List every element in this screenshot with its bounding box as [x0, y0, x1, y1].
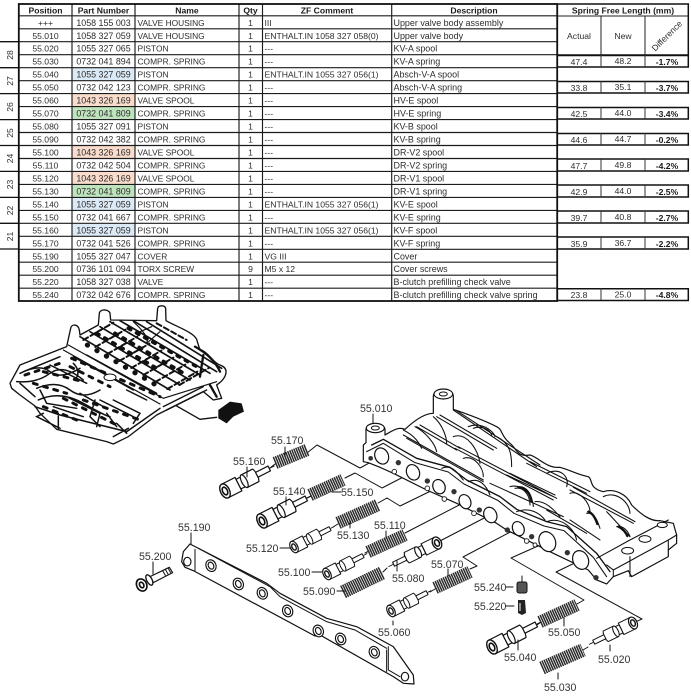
description column: KV-A spool	[394, 44, 437, 54]
spring free length values: -0.2%	[656, 135, 679, 145]
position column: 55.080	[32, 122, 59, 132]
position column: 55.090	[32, 134, 59, 144]
part number column: 0732 041 526	[76, 238, 131, 248]
part number column: 1058 327 059	[76, 31, 131, 41]
part number callouts: 55.140	[273, 486, 306, 498]
quantity column: 1	[248, 199, 253, 209]
callout tick marks	[153, 414, 610, 679]
description column: KV-F spool	[394, 225, 437, 235]
position column	[32, 18, 59, 300]
spring free length values: -4.8%	[656, 290, 679, 300]
quantity column: 1	[248, 57, 253, 67]
part number column: 1055 327 059	[76, 70, 131, 80]
position column: 55.020	[32, 44, 59, 54]
side group numbers: 25	[5, 128, 15, 138]
description column: Absch-V-A spring	[394, 83, 462, 93]
screw 55.200	[134, 567, 173, 593]
part number callouts: 55.150	[341, 487, 374, 499]
spring free length values: 23.8	[571, 290, 588, 300]
lower plate channels	[17, 355, 160, 437]
table header: ZF Comment	[301, 5, 353, 15]
table header: Position	[29, 5, 62, 15]
name column: VALVE HOUSING	[138, 31, 205, 41]
part number callouts: 55.010	[360, 403, 393, 415]
ZF comment column: ---	[264, 83, 273, 93]
spring length column headers: Difference	[650, 18, 684, 53]
coloured part number cells	[72, 68, 135, 236]
name column: COMPR. SPRING	[138, 83, 205, 93]
spring free length values: 47.4	[571, 57, 588, 67]
valve housing 55.010	[363, 389, 677, 584]
spools	[218, 459, 639, 656]
spring free length values: 35.9	[571, 239, 588, 249]
spring free length values: 25.0	[615, 289, 632, 299]
description column: DR-V2 spool	[394, 148, 444, 158]
description column: DR-V1 spool	[394, 173, 444, 183]
spring free length values: 40.8	[615, 212, 632, 222]
position column: 55.070	[32, 109, 59, 119]
description column: Cover screws	[394, 264, 448, 274]
part number callouts: 55.110	[374, 520, 406, 532]
quantity column: 1	[248, 44, 253, 54]
spring free length values: 39.7	[571, 213, 588, 223]
description column: Cover	[394, 251, 417, 261]
quantity column	[248, 18, 253, 300]
part number column: 0732 042 382	[76, 134, 131, 144]
spring free length values: -4.2%	[656, 161, 679, 171]
part number column: 1055 327 059	[76, 199, 131, 209]
side group numbers: 24	[5, 154, 15, 163]
spring free length values: 42.5	[571, 109, 588, 119]
ZF comment column: ---	[264, 212, 273, 222]
quantity column: 1	[248, 83, 253, 93]
description column: HV-E spring	[394, 109, 441, 119]
quantity column: 1	[248, 186, 253, 196]
part number callouts: 55.080	[392, 573, 425, 585]
quantity column: 1	[248, 160, 253, 170]
part number column: 1055 327 091	[76, 122, 131, 132]
spring length column headers: Actual	[567, 31, 591, 41]
part number callouts: 55.120	[246, 543, 279, 555]
spring free length values: -3.7%	[656, 83, 679, 93]
quantity column: 1	[248, 225, 253, 235]
position column: 55.060	[32, 96, 59, 106]
front holes	[87, 345, 160, 387]
spring free length values: 36.7	[615, 238, 632, 248]
spring free length values: 44.6	[571, 135, 588, 145]
cover 55.190	[182, 544, 414, 684]
description column: DR-V1 spring	[394, 186, 447, 196]
part number column: 1055 327 047	[76, 251, 131, 261]
part number callouts: 55.170	[271, 435, 304, 447]
name column: COMPR. SPRING	[138, 160, 205, 170]
part number column: 0732 041 809	[76, 109, 131, 119]
name column: PISTON	[138, 44, 169, 54]
quantity column: 1	[248, 134, 253, 144]
ZF comment column: ---	[264, 122, 273, 132]
ZF comment column: ---	[264, 96, 273, 106]
ZF comment column: ---	[264, 277, 273, 287]
position column: 55.110	[33, 160, 59, 170]
quantity column: 1	[248, 122, 253, 132]
ZF comment column: ENTHALT.IN 1055 327 056(1)	[264, 225, 379, 235]
quantity column: 1	[248, 109, 253, 119]
name column: COMPR. SPRING	[138, 212, 205, 222]
name column: PISTON	[138, 70, 169, 80]
name column: COMPR. SPRING	[138, 109, 205, 119]
part number column: 0732 041 667	[76, 212, 131, 222]
spring free length values: -3.4%	[656, 109, 679, 119]
quantity column: 1	[248, 277, 253, 287]
part number callouts: 55.030	[544, 682, 577, 694]
name column: VALVE HOUSING	[138, 18, 205, 28]
ZF comment column: ---	[264, 238, 273, 248]
spring free length values	[557, 55, 688, 300]
position column: 55.010	[32, 31, 59, 41]
quantity column: 1	[248, 290, 253, 300]
part number column: 0732 042 504	[76, 160, 131, 170]
side group numbers	[0, 42, 18, 249]
description column: B-clutch prefilling check valve spring	[394, 290, 538, 300]
position column: 55.130	[32, 186, 59, 196]
spring free length values: 48.2	[615, 56, 632, 66]
description column: KV-B spring	[394, 134, 441, 144]
spring free length values: -2.7%	[656, 213, 679, 223]
part number column: 1043 326 169	[76, 96, 131, 106]
ZF comment column: ENTHALT.IN 1055 327 056(1)	[264, 70, 379, 80]
quantity column: 1	[248, 148, 253, 158]
table header: Name	[175, 5, 199, 15]
description column: KV-A spring	[394, 57, 440, 67]
part number column: 0732 042 123	[76, 83, 131, 93]
part number column: 1043 326 169	[76, 173, 131, 183]
spring free length values: -2.2%	[656, 239, 679, 249]
part number column: 0732 042 676	[76, 290, 131, 300]
ZF comment column: VG III	[264, 251, 286, 261]
spring free length values: -2.5%	[656, 187, 679, 197]
assembled valve body illustration	[10, 306, 244, 444]
side group numbers: 21	[5, 232, 15, 241]
name column: COMPR. SPRING	[138, 186, 205, 196]
quantity column: 1	[248, 96, 253, 106]
description column: HV-E spool	[394, 96, 438, 106]
part number column: 0732 041 809	[76, 186, 131, 196]
description column: B-clutch prefilling check valve	[394, 277, 511, 287]
name column: COMPR. SPRING	[138, 238, 205, 248]
description column: Upper valve body	[394, 31, 464, 41]
ZF comment column: ---	[264, 160, 273, 170]
part number callouts: 55.050	[548, 627, 581, 639]
ZF comment column: ---	[264, 109, 273, 119]
part number column: 0732 041 894	[76, 57, 131, 67]
ZF comment column: ENTHALT.IN 1058 327 058(0)	[264, 31, 379, 41]
name column: PISTON	[138, 225, 169, 235]
description column: Absch-V-A spool	[394, 70, 459, 80]
position column: 55.170	[32, 238, 59, 248]
quantity column: 1	[248, 238, 253, 248]
table grid	[18, 4, 688, 301]
name column: VALVE SPOOL	[138, 148, 195, 158]
position column: 55.040	[32, 70, 59, 80]
ZF comment column	[264, 18, 379, 300]
table header: Spring Free Length (mm)	[572, 5, 674, 15]
name column: COMPR. SPRING	[138, 290, 205, 300]
description column: Upper valve body assembly	[394, 18, 504, 28]
name column: COMPR. SPRING	[138, 57, 205, 67]
part number column: 1058 327 038	[76, 277, 131, 287]
side group numbers: 28	[5, 50, 15, 60]
part number column	[76, 18, 131, 300]
name column: VALVE SPOOL	[138, 173, 195, 183]
exploded view leader lines	[183, 445, 642, 650]
table header: Qty	[243, 5, 258, 15]
spring free length values: 33.8	[571, 83, 588, 93]
side group numbers: 23	[5, 180, 15, 189]
ZF comment column: ---	[264, 148, 273, 158]
spring free length values: 44.0	[615, 108, 632, 118]
part number callouts: 55.220	[474, 601, 507, 613]
description column: DR-V2 spring	[394, 160, 447, 170]
ZF comment column: M5 x 12	[264, 264, 295, 274]
part number callouts: 55.040	[504, 652, 537, 664]
spring free length values: 42.9	[571, 187, 588, 197]
parts table	[0, 4, 688, 301]
ZF comment column: ---	[264, 134, 273, 144]
part number column: 1058 155 003	[76, 18, 131, 28]
side group numbers: 22	[5, 206, 15, 215]
description column: KV-E spool	[394, 199, 438, 209]
spring free length values: -1.7%	[656, 57, 679, 67]
position column: 55.030	[32, 57, 59, 67]
spring free length values: 47.7	[571, 161, 588, 171]
name column: PISTON	[138, 199, 169, 209]
position column: 55.100	[32, 148, 59, 158]
part number callouts: 55.100	[278, 567, 311, 579]
quantity column: 1	[248, 212, 253, 222]
quantity column: 1	[248, 18, 253, 28]
wiring connector	[177, 402, 244, 423]
name column: PISTON	[138, 122, 169, 132]
position column: +++	[38, 18, 53, 28]
check valve parts	[517, 582, 527, 615]
spring length column headers: New	[614, 31, 632, 41]
part number callouts: 55.060	[378, 627, 411, 639]
quantity column: 1	[248, 70, 253, 80]
name column: VALVE	[138, 277, 164, 287]
position column: 55.140	[32, 199, 59, 209]
position column: 55.160	[32, 225, 59, 235]
part number callouts: 55.090	[303, 586, 336, 598]
part number column: 1055 327 059	[76, 225, 131, 235]
part number column: 1043 326 169	[76, 148, 131, 158]
side group numbers: 27	[5, 76, 15, 86]
part number callouts: 55.070	[431, 559, 464, 571]
quantity column: 1	[248, 31, 253, 41]
spring free length values: 35.1	[615, 82, 632, 92]
position column: 55.120	[32, 173, 59, 183]
side group numbers: 26	[5, 102, 15, 112]
description column: KV-F spring	[394, 238, 440, 248]
table header	[29, 5, 674, 15]
position column: 55.220	[32, 277, 59, 287]
springs	[275, 450, 583, 668]
part number callouts: 55.200	[139, 551, 172, 563]
name column: COMPR. SPRING	[138, 134, 205, 144]
name column: VALVE SPOOL	[138, 96, 195, 106]
position column: 55.050	[32, 83, 59, 93]
position column: 55.240	[32, 290, 59, 300]
spring free length values: 44.0	[615, 186, 632, 196]
part number callouts: 55.240	[474, 582, 507, 594]
ZF comment column: ---	[264, 57, 273, 67]
description column: KV-B spool	[394, 122, 438, 132]
spring free length values: 44.7	[615, 134, 632, 144]
part number callouts	[139, 403, 631, 694]
position column: 55.150	[32, 212, 59, 222]
ZF comment column: ---	[264, 44, 273, 54]
ZF comment column: ENTHALT.IN 1055 327 056(1)	[264, 199, 379, 209]
part number callouts: 55.130	[337, 530, 370, 542]
position column: 55.200	[32, 264, 59, 274]
upper block grid lines	[80, 321, 222, 390]
quantity column: 1	[248, 251, 253, 261]
spring length column headers	[567, 18, 684, 53]
ZF comment column: ---	[264, 186, 273, 196]
part number callouts: 55.190	[178, 522, 211, 534]
quantity column: 1	[248, 173, 253, 183]
ZF comment column: ---	[264, 173, 273, 183]
ZF comment column: ---	[264, 290, 273, 300]
table header: Description	[450, 5, 498, 15]
position column: 55.190	[32, 251, 59, 261]
part number callouts: 55.160	[233, 456, 266, 468]
description column	[394, 18, 538, 300]
part number column: 1055 327 065	[76, 44, 131, 54]
quantity column: 9	[248, 264, 253, 274]
ZF comment column: III	[264, 18, 272, 28]
part number column: 0736 101 094	[76, 264, 131, 274]
spring free length values: 49.8	[615, 160, 632, 170]
name column: TORX SCREW	[138, 264, 194, 274]
name column: COVER	[138, 251, 167, 261]
table header: Part Number	[78, 5, 130, 15]
part number callouts: 55.020	[598, 654, 631, 666]
description column: KV-E spring	[394, 212, 441, 222]
name column	[138, 18, 205, 300]
